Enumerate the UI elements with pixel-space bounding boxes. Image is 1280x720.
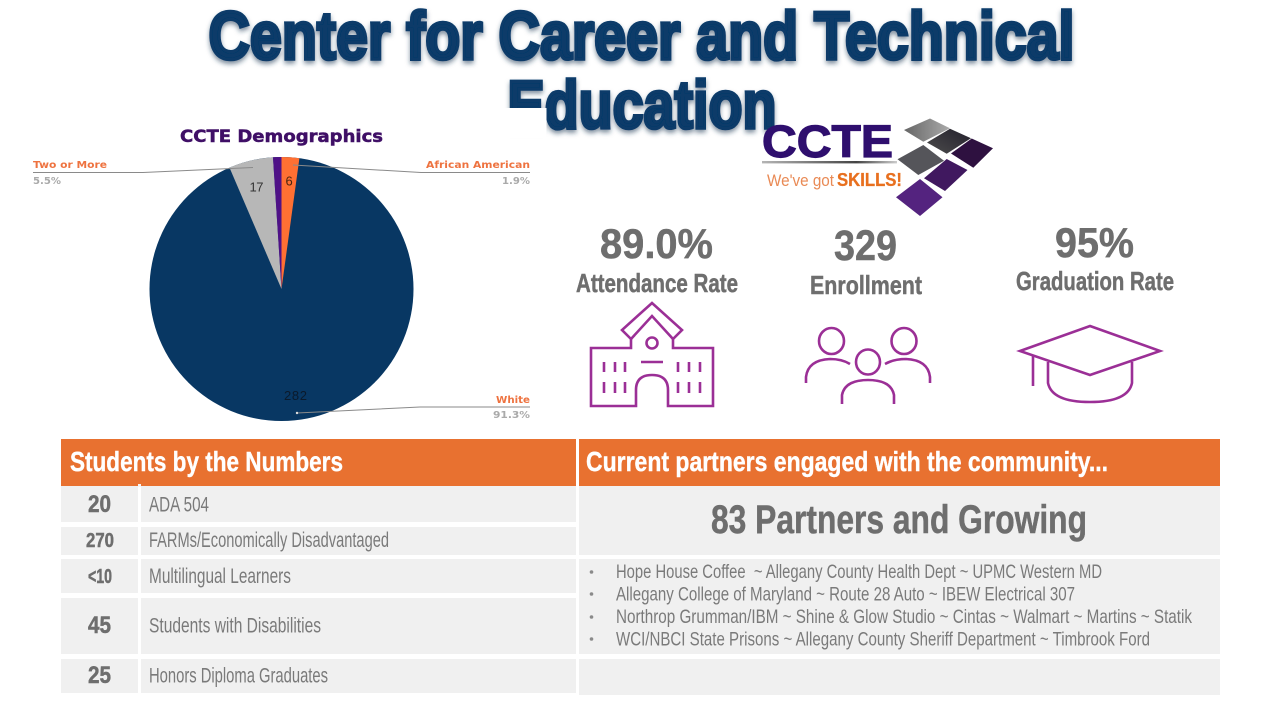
- pie chart: [150, 157, 414, 421]
- partner list: [579, 559, 1220, 654]
- stat: graduation rate: 95%: [1055, 219, 1134, 266]
- row: honors diploma graduates: 25: [88, 662, 111, 689]
- legend: african american: [426, 160, 530, 187]
- pie value labels: 17: [250, 180, 264, 194]
- legend: two or more: Two or More: [33, 160, 107, 171]
- logo: CCTE: [762, 116, 993, 216]
- panel: current partners: [579, 439, 1220, 695]
- stat: attendance rate: 89.0%: [600, 220, 713, 267]
- chart title: CCTE Demographics: [180, 127, 383, 147]
- header: current partners: [579, 439, 1220, 486]
- icon: group of people: [806, 328, 930, 404]
- partner list: Allegany College of Maryland ~ Route 28 Auto ~ IBEW Electrical 307: [616, 584, 1075, 606]
- legend: white: [493, 395, 531, 421]
- icon: school building: [591, 303, 713, 406]
- row: honors diploma graduates: [61, 659, 576, 693]
- stat: attendance rate: Attendance Rate: [576, 268, 738, 298]
- header: students by the numbers: Students by the Numbers: [70, 446, 343, 477]
- partner count: 83 Partners and Growing: [711, 498, 1087, 542]
- row: students with disabilities: 45: [88, 612, 111, 639]
- row: FARMs: 270: [86, 530, 114, 552]
- row: multilingual learners: Multilingual Learners: [149, 565, 291, 588]
- row: FARMs: FARMs/Economically Disadvantaged: [149, 529, 389, 552]
- leader lines: [33, 165, 530, 414]
- row: multilingual learners: [61, 559, 576, 593]
- title: [208, 0, 1074, 143]
- row: ADA 504: [61, 486, 576, 522]
- header: current partners: Current partners engaged with the community...: [586, 446, 1108, 477]
- icon: graduation cap: [1020, 326, 1160, 402]
- logo: CCTE: CCTE: [762, 116, 893, 167]
- legend: two or more: [33, 160, 107, 187]
- row: FARMs: [61, 527, 576, 555]
- row: multilingual learners: <10: [88, 566, 112, 588]
- stat: enrollment: Enrollment: [810, 270, 922, 300]
- empty table row: [579, 659, 1220, 695]
- legend: white: White: [496, 395, 530, 406]
- pie value labels: [250, 174, 307, 403]
- title: Center for Career and Technical: [208, 0, 1074, 74]
- title: Education: [508, 67, 776, 143]
- header: students by the numbers: [61, 439, 576, 487]
- stat: attendance rate: [576, 220, 738, 298]
- row: ADA 504: 20: [88, 491, 111, 518]
- row: honors diploma graduates: Honors Diploma Graduates: [149, 664, 328, 688]
- pie value labels: 282: [284, 388, 307, 403]
- row: ADA 504: ADA 504: [149, 494, 209, 516]
- legend: african american: 1.9%: [502, 176, 530, 187]
- logo: CCTE: We've got: [767, 171, 834, 190]
- pie value labels: 6: [286, 174, 293, 188]
- legend: african american: African American: [426, 160, 530, 171]
- panel: students by the numbers: [61, 439, 576, 693]
- stat: enrollment: [810, 222, 922, 300]
- stat: enrollment: 329: [834, 222, 897, 270]
- row: students with disabilities: Students with Disabilities: [149, 614, 321, 638]
- panel: demographics pie chart: [33, 127, 531, 421]
- stat: graduation rate: Graduation Rate: [1016, 266, 1174, 296]
- logo: CCTE: SKILLS!: [837, 170, 902, 190]
- partner count: [579, 486, 1220, 555]
- stat: graduation rate: [1016, 219, 1174, 296]
- legend: two or more: 5.5%: [33, 176, 61, 187]
- partner list: Hope House Coffee ~ Allegany County Health Dept ~ UPMC Western MD: [616, 561, 1102, 583]
- row: students with disabilities: [61, 598, 576, 654]
- legend: white: 91.3%: [493, 410, 531, 421]
